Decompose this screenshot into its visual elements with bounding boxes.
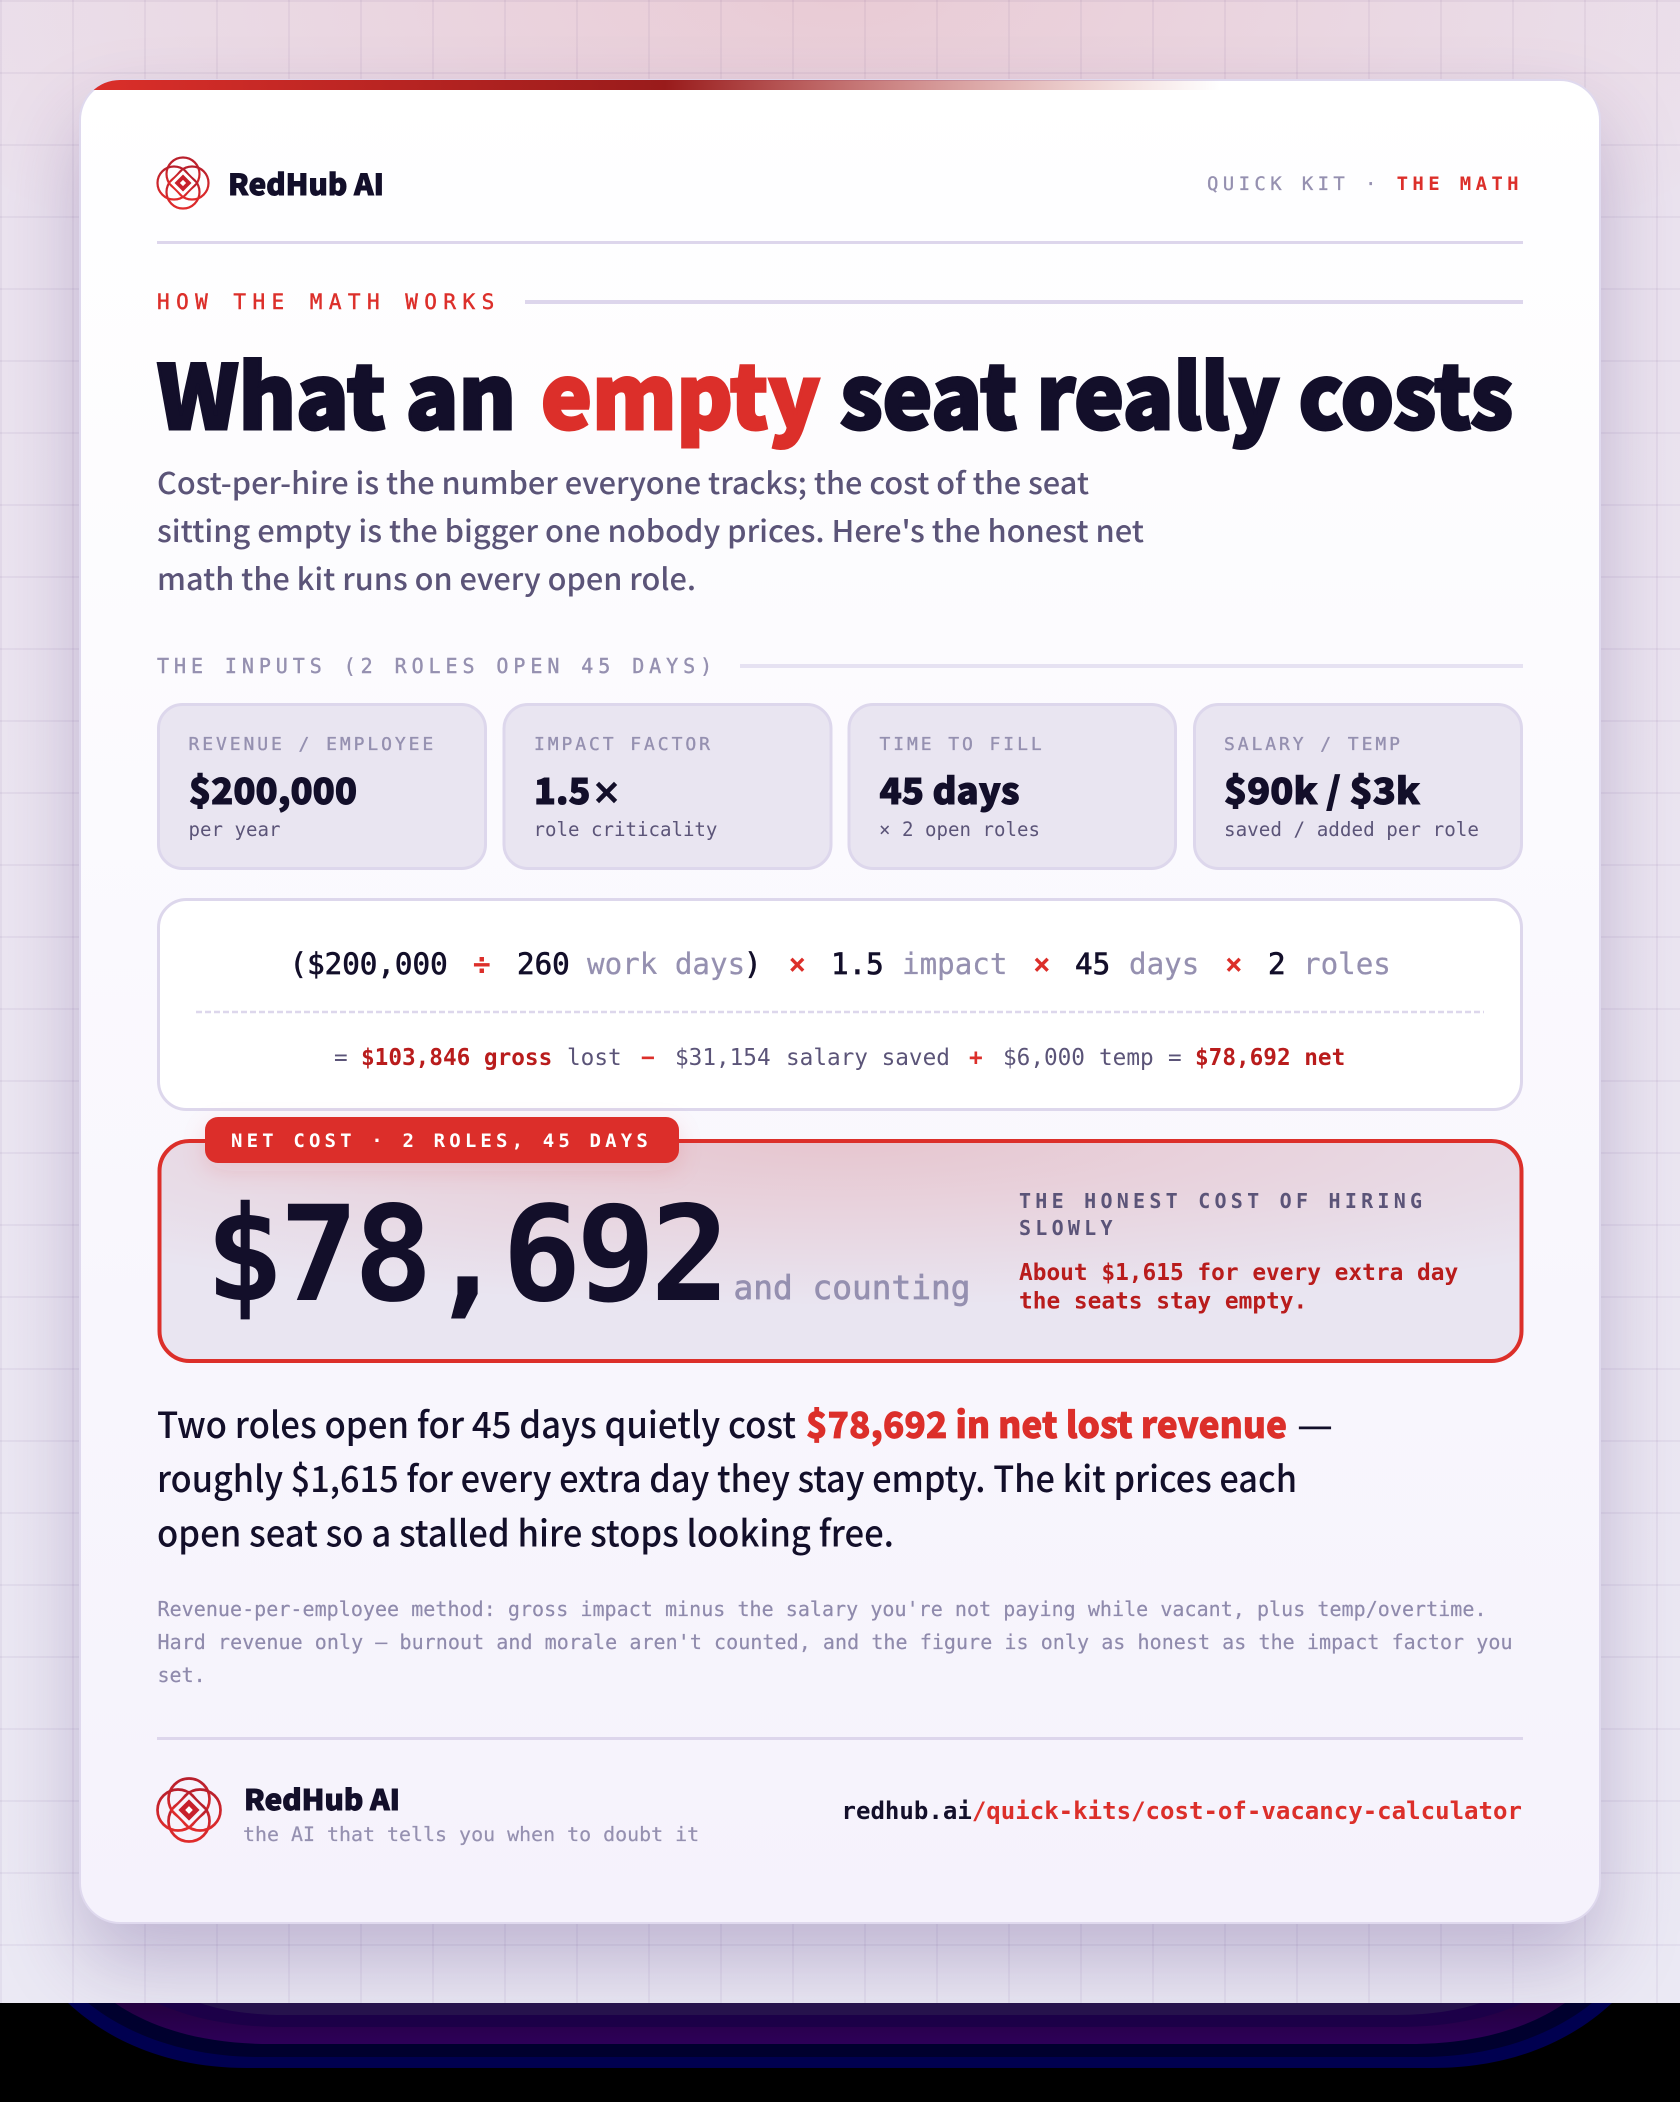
formula line one: × [1033,947,1051,981]
title: seat really costs [840,328,1513,455]
formula line two: lost [567,1045,622,1071]
and counting: and counting [734,1269,970,1307]
formula line one: × [788,947,806,981]
eyebrow rule [525,300,1523,304]
summary paragraph: Two roles open for 45 days quietly cost [157,1397,796,1449]
method note: Hard revenue only — burnout and morale aren't counted, and the figure is only as honest as the impact factor you [158,1630,1512,1654]
summary paragraph: open seat so a stalled hire stops looking free. [157,1506,894,1558]
panel: net cost result [160,1117,1522,1361]
summary paragraph: $78,692 in net lost revenue [806,1397,1287,1449]
formula line two: − [641,1045,655,1071]
clipped shadow bands on black [68,2003,1612,2068]
result caption [1019,1189,1458,1314]
subtitle: sitting empty is the bigger one nobody prices. Here's the honest net [157,507,1144,551]
footer tagline: the AI that tells you when to doubt it [243,1822,699,1846]
formula line one: 260 [517,947,570,981]
formula line two: $6,000 [1003,1045,1085,1071]
panel: time to fill: TIME TO FILL [880,734,1045,755]
footer rule [157,1737,1523,1740]
panel: impact factor [504,704,831,868]
panel: impact factor: 1.5× [534,763,621,815]
panel: salary and temp: SALARY / TEMP [1224,734,1403,755]
summary paragraph: roughly $1,615 for every extra day they stay empty. The kit prices each [157,1451,1297,1503]
formula line one: × [1225,947,1243,981]
badge: net cost [205,1117,679,1163]
formula line one: 1.5 [831,947,884,981]
summary paragraph [157,1397,1333,1558]
formula line one: 45 [1075,947,1110,981]
formula line two: salary saved [786,1045,950,1071]
title [157,328,1513,455]
footer url: redhub.ai/quick-kits/cost-of-vacancy-calculator [842,1797,1522,1825]
icon: footer logo [158,1778,220,1842]
subtitle: Cost-per-hire is the number everyone tracks; the cost of the seat [157,459,1089,503]
panel: formula [158,900,1522,1110]
panel: revenue per employee: REVENUE / EMPLOYEE [188,734,436,755]
brand name: RedHub AI [228,162,384,204]
result caption: About $1,615 for every extra day [1019,1260,1458,1286]
formula line two: + [969,1045,983,1071]
formula line one: impact [902,947,1007,981]
formula line two: = [334,1045,348,1071]
formula line two: temp [1099,1045,1154,1071]
result caption: the seats stay empty. [1019,1288,1307,1314]
panel: impact factor: IMPACT FACTOR [534,734,713,755]
method note: set. [158,1663,206,1687]
formula line one: roles [1303,947,1391,981]
header rule [157,241,1523,244]
subtitle [157,459,1144,599]
formula line two: $78,692 net [1195,1045,1345,1071]
panel: time to fill: × 2 open roles [879,818,1040,841]
result caption: THE HONEST COST OF HIRING [1019,1189,1426,1213]
eyebrow: HOW THE MATH WORKS [157,290,501,314]
formula line one: work days [587,947,745,981]
formula line one: ÷ [473,947,491,981]
result caption: SLOWLY [1019,1216,1117,1240]
panel: time to fill [849,704,1176,868]
formula line two: $103,846 gross [361,1045,552,1071]
panel: impact factor: role criticality [534,818,717,841]
panel: revenue per employee [158,704,486,868]
panel: main card [80,80,1600,1923]
formula line one: ) [744,947,762,981]
method note [158,1597,1512,1687]
formula line two: $31,154 [675,1045,771,1071]
big number: $78,692 [205,1178,730,1332]
title: empty [541,328,820,455]
badge: net cost: NET COST · 2 ROLES, 45 DAYS [231,1130,652,1152]
subtitle: math the kit runs on every open role. [157,555,696,599]
formula line one: ($200,000 [290,947,448,981]
formula line one [290,947,1391,981]
panel: time to fill: 45 days [880,763,1020,815]
formula line two: = [1168,1045,1182,1071]
summary paragraph: — [1297,1397,1333,1449]
title: What an [157,328,516,455]
formula line two [334,1045,1345,1071]
panel: salary and temp [1194,704,1522,868]
footer brand: RedHub AI [244,1779,400,1819]
formula line one: days [1129,947,1199,981]
icon: RedHub logo [158,158,208,208]
inputs rule [740,664,1523,668]
panel: salary and temp: $90k / $3k [1224,763,1420,815]
panel: salary and temp: saved / added per role [1224,818,1479,841]
formula line one: 2 [1268,947,1286,981]
kit tag: QUICK KIT · THE MATH [1207,173,1523,195]
panel: revenue per employee: per year [188,818,280,841]
method note: Revenue-per-employee method: gross impact minus the salary you're not paying while vacant, plus temp/overtime. [158,1597,1486,1621]
panel: revenue per employee: $200,000 [189,763,357,815]
section label: inputs: THE INPUTS (2 ROLES OPEN 45 DAYS) [157,654,717,678]
